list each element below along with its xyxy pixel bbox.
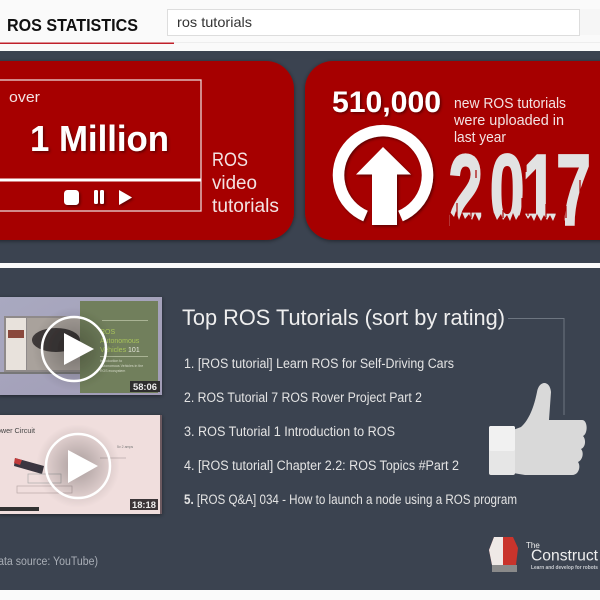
tutorials list: 5. [ROS Q&A] 034 - How to launch a node using a ROS program [184,492,517,507]
green slide panel: Vehicles 101 [100,347,140,354]
duration badge: 18:18 [132,500,156,510]
text: new ROS tutorials uploaded: new ROS tutorials [454,96,566,112]
player controls [64,190,132,205]
green slide panel: Autonomous Vehicles in the [100,364,143,368]
tutorials list [184,356,517,507]
circuit diagram [0,445,133,511]
video thumbnail 1 [0,297,162,395]
video thumbnail 2 [0,415,162,514]
heading: ROS Statistics: ROS STATISTICS [7,15,138,35]
dark band: top tutorials [0,268,600,590]
logo: The Construct [489,537,599,572]
green slide panel: Autonomous [100,338,140,345]
heading: Top ROS Tutorials: Top ROS Tutorials (sort by rating) [182,305,505,330]
play button [32,307,116,391]
duration badge: 58:06 [133,382,157,392]
circuit diagram: 5v 2 amps [117,445,133,449]
tutorials list: 3. ROS Tutorial 1 Introduction to ROS [184,424,395,439]
search box [168,10,580,36]
text: new ROS tutorials uploaded: last year [454,130,506,146]
search box: ros tutorials [177,14,252,30]
label: ROS video tutorials: ROS [212,149,248,171]
panel: video tutorials count [0,61,294,240]
label: ROS video tutorials: video [212,172,257,194]
play button [36,424,120,508]
stat: 1 Million: 1 Million [30,118,169,159]
logo chair icon [489,537,518,572]
video player frame [0,80,201,211]
label: ROS video tutorials: tutorials [212,195,279,217]
tutorials list: 1. [ROS tutorial] Learn ROS for Self-Driving Cars [184,356,454,371]
tutorials list: 4. [ROS tutorial] Chapter 2.2: ROS Topics #Part 2 [184,458,459,473]
logo: The Construct: Learn and develop for robots [531,565,598,571]
panel: uploads in 2017 [305,61,600,247]
icon: upload arrow in ring [338,131,428,225]
green slide panel: ROS [100,329,116,336]
logo: The Construct: Construct [531,548,599,564]
text: over: over [9,89,40,106]
year: 2017: 2017 [448,134,591,247]
dark band: top statistics [0,51,600,263]
green slide panel: Introduction to [100,359,122,363]
green slide panel [80,301,158,393]
duration badge [130,381,160,392]
text: new ROS tutorials uploaded [453,96,566,146]
icon: thumbs up [489,383,587,475]
connector line [508,318,564,415]
tutorials list: 2. ROS Tutorial 7 ROS Rover Project Part 2 [184,390,422,405]
stat: 510,000: 510,000 [332,86,441,119]
label: ROS video tutorials [212,149,279,217]
header [0,9,600,44]
green slide panel: ROS ecosystem [100,369,125,373]
laptop screenshot [0,316,92,374]
text: new ROS tutorials uploaded: were uploaded in [453,113,564,129]
logo: The Construct: The [526,541,540,550]
